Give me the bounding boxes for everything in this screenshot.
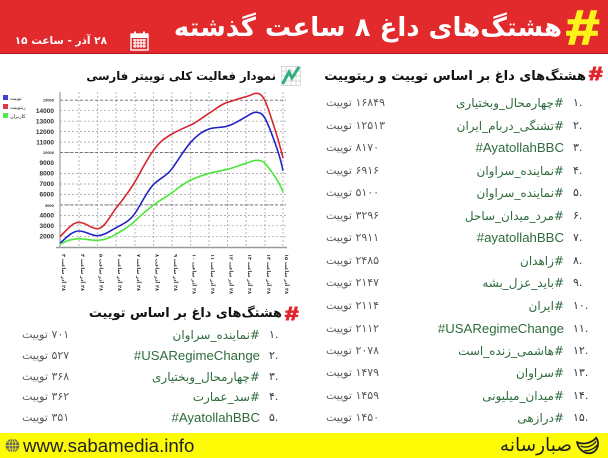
row 8: ۲۴۸۵ توییت [326,254,379,267]
row 15: .۱۵ [573,411,588,424]
series: blue tweet [60,112,283,243]
website url: www.sabamedia.info [23,435,194,456]
row 4: .۴ [573,164,582,177]
y axis labels: 11000 [36,139,54,146]
series: green users [60,160,283,244]
row 3: .۳ [269,370,278,383]
row 10: .۱۰ [573,299,588,312]
y axis labels: 15000 [43,98,55,102]
x axis labels: ۲۸ آذر ساعت ۷ [135,254,143,291]
row 4: ۶۹۱۶ توییت [326,164,379,177]
row 15 [326,411,588,425]
x axis labels: ۲۸ آذر ساعت ۴ [79,254,87,291]
row 10: #ایران [528,299,564,313]
icon: brand logo [576,436,599,454]
row 3: #AyatollahBBC [476,140,564,155]
row 5: ۵۱۰۰ توییت [326,186,379,199]
legend [3,95,26,120]
icon: globe [6,438,20,452]
row 3: ۳۶۸ توییت [22,370,69,383]
row 4: .۴ [269,390,278,403]
y axis labels: 8000 [40,171,54,178]
row 10 [326,299,588,313]
row 5 [22,410,278,425]
row 4 [22,390,278,404]
x axis labels: ۲۸ آذر ساعت ۱۱ [209,254,217,294]
x axis labels: ۲۸ آذر ساعت ۱۴ [265,254,273,294]
row 8 [326,254,582,268]
x axis labels: ۲۸ آذر ساعت ۵ [98,254,106,291]
row 5 [326,186,582,200]
row 10: ۲۱۱۴ توییت [326,299,379,312]
row 1: .۱ [269,328,278,341]
brand name: صبارسانه [500,435,572,456]
hashtag list: tweet and retweet [326,96,588,425]
header band [0,0,608,54]
row 4: ۳۶۲ توییت [22,390,69,403]
x axis labels: ۲۸ آذر ساعت ۹ [172,254,180,291]
y axis labels: 12000 [36,129,54,136]
heading: هشتگ‌های داغ بر اساس توییت و ریتوییت [324,69,586,84]
row 5: #AyatollahBBC [172,410,260,425]
row 11: ۲۱۱۲ توییت [326,322,379,335]
icon: yellow hash: # [566,2,599,55]
series: red retweet [60,93,283,237]
x axis labels: ۲۸ آذر ساعت ۸ [154,254,162,291]
row 3 [22,370,278,384]
row 14 [326,389,588,403]
title: هشتگ‌های داغ ۸ ساعت گذشته [174,13,562,43]
row 7: #ayatollahBBC [477,230,564,245]
panel: top hashtags by tweet [22,304,299,425]
row 8: .۸ [573,254,582,267]
row 6: #مرد_میدان_ساحل [465,209,564,223]
chart heading [86,66,301,86]
legend: ریتوییت [10,105,26,111]
row 11: #USARegimeChange [438,321,564,336]
row 13: ۱۴۷۹ توییت [326,366,379,379]
row 1: #نماینده_سراوان [172,328,260,342]
row 15: ۱۴۵۰ توییت [326,411,379,424]
row 7: ۲۹۱۱ توییت [326,231,379,244]
row 5: .۵ [269,411,278,424]
row 13 [326,366,588,380]
line chart [3,92,291,294]
row 12: .۱۲ [573,344,588,357]
row 14: #میدان_میلیونی [482,389,564,403]
row 5: ۳۵۱ توییت [22,411,69,424]
icon: calendar [130,32,149,51]
row 12 [326,344,588,358]
icon: red hash: # [589,64,603,84]
row 7: .۷ [573,231,582,244]
row 5: .۵ [573,186,582,199]
x axis labels: ۲۸ آذر ساعت ۳ [60,254,68,291]
chart title: نمودار فعالیت کلی توییتر فارسی [86,69,276,83]
row 4: #سد_عمارت [193,390,260,404]
row 2: #USARegimeChange [134,348,260,363]
legend: توییت [10,96,22,102]
row 11: .۱۱ [573,322,588,335]
legend: کاربران [10,114,26,120]
row 9: #باید_عزل_بشه [482,276,564,290]
panel: top hashtags by tweet and retweet [324,64,603,84]
y axis labels: 2000 [40,234,54,240]
x axis labels: ۲۸ آذر ساعت ۶ [116,254,124,291]
row 3: #چهارمحال_وبختیاری [152,370,260,384]
row 7 [326,230,582,245]
date text: ۲۸ آذر - ساعت ۱۵ [15,35,107,47]
y axis labels: 3000 [40,223,54,230]
row 2: .۲ [269,349,278,362]
row 14: ۱۴۵۹ توییت [326,389,379,402]
icon: red hash: # [285,304,299,324]
icon: chart trend [281,66,301,86]
y axis labels [36,98,55,240]
row 2: .۲ [573,119,582,132]
row 12: ۲۰۷۸ توییت [326,344,379,357]
y axis labels: 13000 [36,118,54,125]
row 15: #درازهی [517,411,564,425]
y axis labels: 7000 [40,181,54,188]
row 1: .۱ [573,96,582,109]
row 1: #چهارمحال_وبختیاری [456,96,564,110]
x axis labels: ۲۸ آذر ساعت ۱۲ [228,254,236,294]
row 1 [326,96,582,110]
row 9 [326,276,582,290]
row 6: .۶ [573,209,582,222]
row 11 [326,321,588,336]
row 12: #هاشمی_زنده_است [458,344,564,358]
row 2: #تشنگی_دربام_ایران [457,119,564,133]
y axis labels: 9000 [40,160,54,167]
row 1: ۱۶۸۴۹ توییت [326,96,385,109]
y axis labels: 5000 [45,203,55,208]
row 3: .۳ [573,141,582,154]
x axis labels: ۲۸ آذر ساعت ۱۰ [191,254,199,294]
row 1: ۷۰۱ توییت [22,328,69,341]
row 9: .۹ [573,276,582,289]
row 8: #زاهدان [520,254,564,268]
row 13: #سراوان [516,366,564,380]
row 3 [326,140,582,155]
row 4 [326,164,582,178]
x axis labels [60,254,291,294]
row 5: #نماینده_سراوان [476,186,564,200]
y axis labels: 4000 [40,212,54,220]
row 6 [326,209,582,223]
row 2 [22,348,278,363]
footer band [0,433,608,458]
row 6: ۳۲۹۶ توییت [326,209,379,222]
row 3: ۸۱۷۰ توییت [326,141,379,154]
row 2 [326,119,582,133]
row 2: ۵۲۷ توییت [22,349,69,362]
row 9: ۲۱۴۷ توییت [326,276,379,289]
row 4: #نماینده_سراوان [476,164,564,178]
row 1 [22,328,278,342]
x axis labels: ۲۸ آذر ساعت ۱۳ [246,254,254,294]
y axis labels: 14000 [36,108,54,115]
row 14: .۱۴ [573,389,588,402]
row 2: ۱۲۵۱۳ توییت [326,119,385,132]
y axis labels: 10000 [43,150,55,155]
y axis labels: 6000 [40,192,54,198]
x axis labels: ۲۸ آذر ساعت ۱۵ [283,254,291,294]
row 13: .۱۳ [573,366,588,379]
heading: هشتگ‌های داغ بر اساس توییت [89,306,282,321]
